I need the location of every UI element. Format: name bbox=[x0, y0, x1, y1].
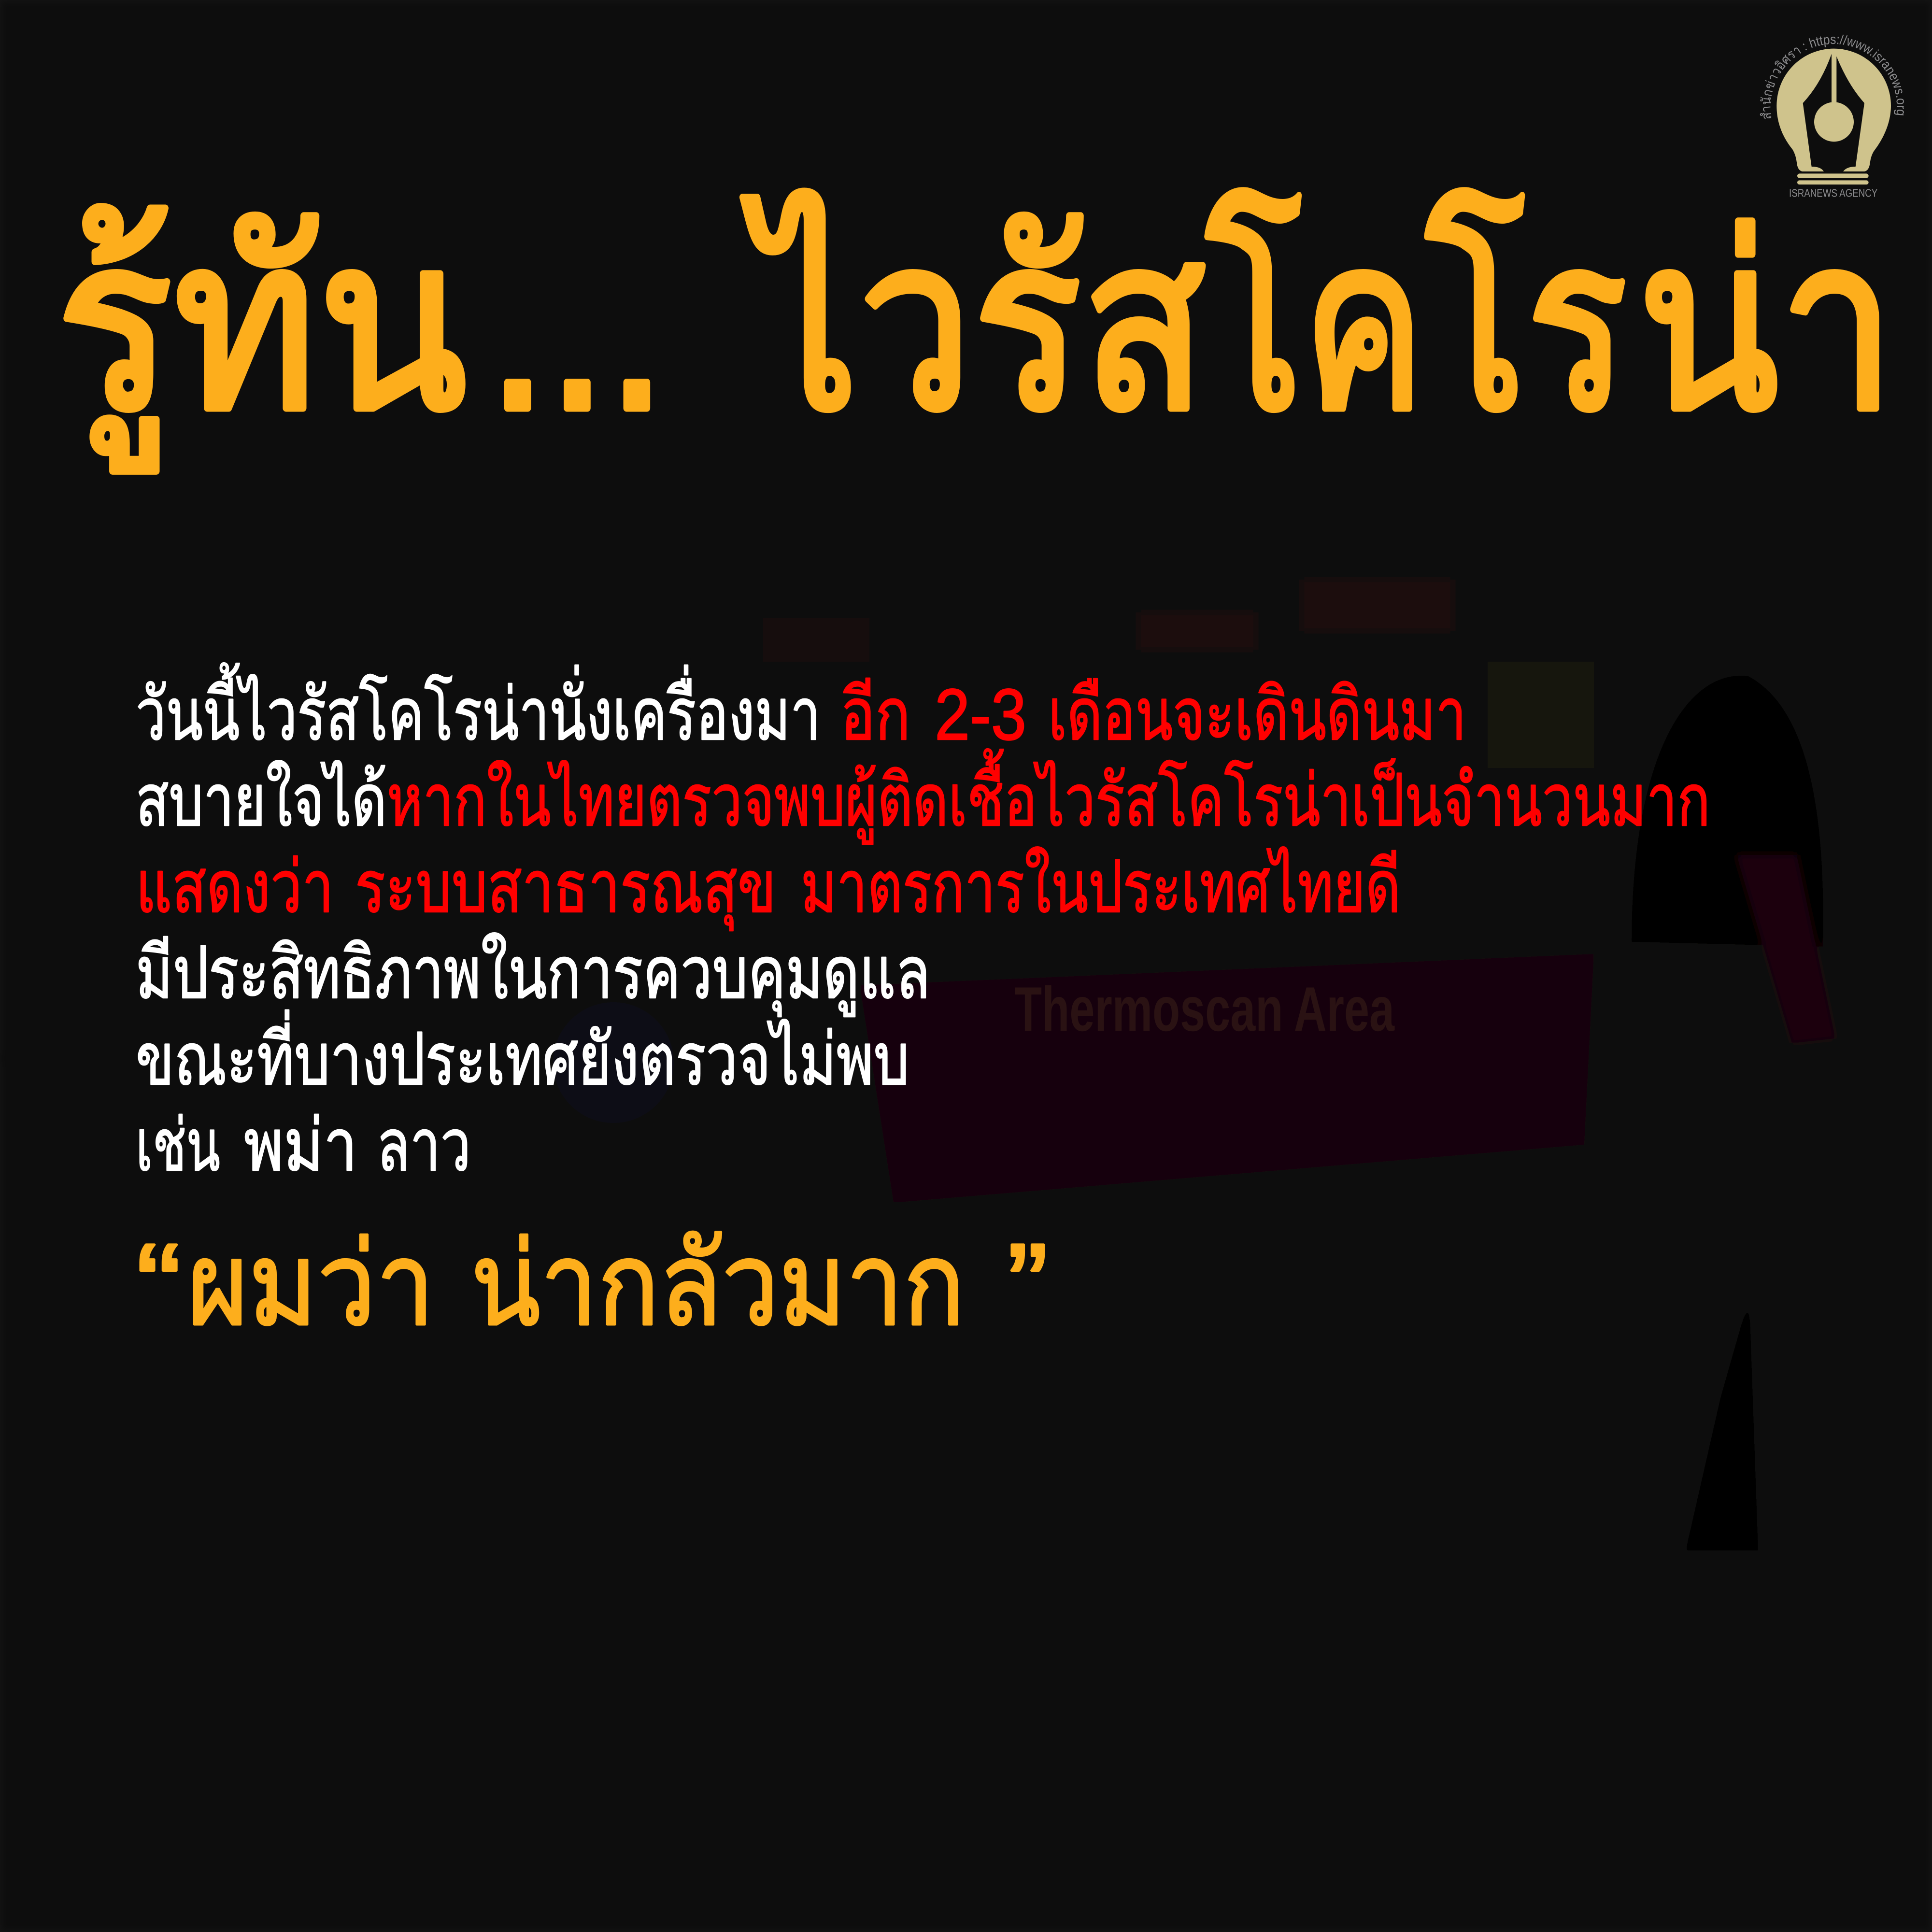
quote: น่ากลัวมาก bbox=[471, 1220, 965, 1349]
line 3 red: ระบบสาธารณสุข bbox=[355, 846, 776, 931]
title: น่า bbox=[1637, 189, 1896, 459]
quote: ผมว่า bbox=[187, 1220, 435, 1349]
line 5 white: ขณะที่บางประเทศยังตรวจไม่พบ bbox=[136, 1010, 909, 1100]
line 6 white: เช่น bbox=[136, 1105, 220, 1186]
line 1 red: 2-3 bbox=[935, 674, 1026, 755]
line 6 white bbox=[136, 1105, 471, 1186]
line 6 white: ลาว bbox=[377, 1105, 471, 1186]
title: โร bbox=[1425, 189, 1628, 459]
line 6 white: พม่า bbox=[244, 1105, 357, 1186]
line 2 white: สบายใจได้ bbox=[136, 760, 387, 841]
line 3 red: แสดงว่า bbox=[136, 846, 334, 927]
body text block bbox=[136, 663, 1710, 1186]
faint banner text in photo: Thermoscan Area bbox=[1014, 974, 1395, 1044]
line 3 red: มาตรการในประเทศไทยดี bbox=[801, 846, 1401, 927]
title: โค bbox=[1205, 189, 1425, 459]
line 1 red: อีก bbox=[840, 674, 910, 755]
line 1 red: เดือนจะเดินดินมา bbox=[1048, 674, 1466, 755]
title bbox=[56, 189, 1896, 472]
title: ... bbox=[488, 189, 667, 459]
line 4 white: มีประสิทธิภาพในการควบคุมดูแล bbox=[136, 932, 930, 1017]
quote: ” bbox=[1007, 1220, 1048, 1349]
logo: isranews agency bbox=[1760, 35, 1904, 199]
logo: isranews agency: สำนักข่าวอิศรา : https://www.isranews.org bbox=[1760, 35, 1904, 119]
quote bbox=[136, 1220, 1048, 1349]
line 1 white: วันนี้ไวรัสโคโรน่านั่งเครื่องมา bbox=[136, 663, 821, 755]
title: รู้ทัน bbox=[56, 189, 468, 472]
title: ไวรัส bbox=[740, 189, 1207, 459]
logo: isranews agency: ISRANEWS AGENCY bbox=[1789, 186, 1877, 199]
line 1 red bbox=[840, 674, 1466, 755]
quote: “ bbox=[136, 1220, 182, 1349]
line 3 red bbox=[136, 846, 1401, 931]
